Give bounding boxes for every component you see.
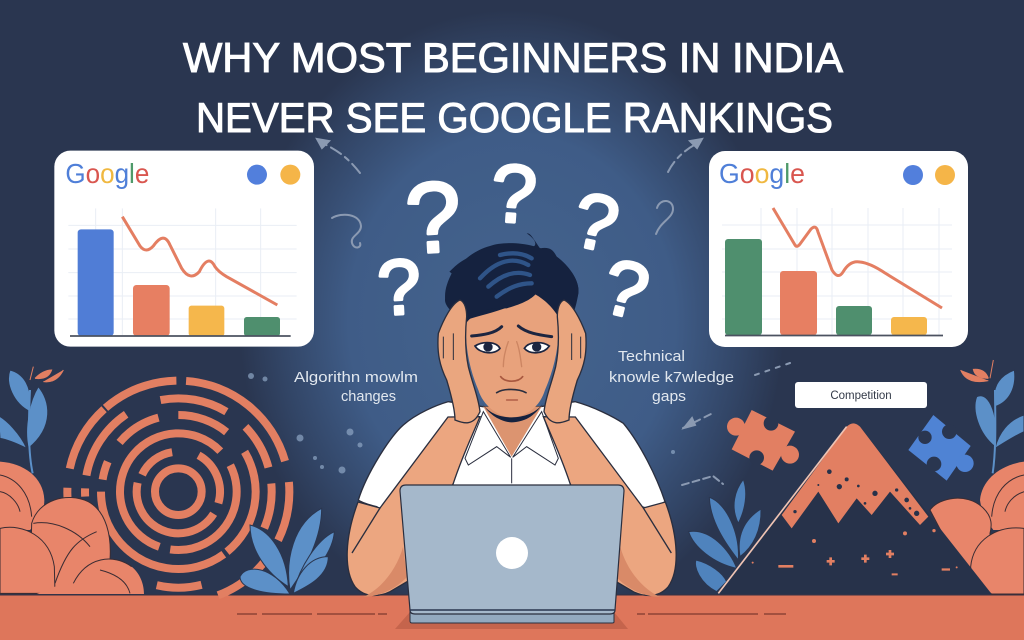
eyebrows <box>472 326 552 337</box>
floating dots <box>248 373 675 474</box>
right scene: mountain, puzzle pieces, plants <box>689 360 1024 594</box>
left arm <box>347 417 480 597</box>
icon: laptop <box>400 485 624 623</box>
callout: Competition: Competition <box>830 390 892 402</box>
grid lines <box>68 208 297 335</box>
Google logo: Google <box>65 158 149 189</box>
table <box>0 595 1024 640</box>
grid lines <box>722 208 952 335</box>
decorative dashed arrows and swirls <box>317 139 790 485</box>
neck <box>483 407 542 457</box>
Google logo: Google <box>719 158 805 189</box>
declining trend line <box>773 208 942 308</box>
hair front <box>445 233 579 323</box>
question marks <box>375 148 657 337</box>
icon: blue plant <box>961 360 1024 473</box>
hair back <box>445 243 579 323</box>
card <box>709 151 968 347</box>
panel: left Google chart card <box>54 151 314 347</box>
shirt <box>358 402 665 520</box>
icon: coral puzzle piece <box>727 410 799 471</box>
collar <box>465 412 558 483</box>
laptop logo <box>496 537 528 569</box>
text: technical knowledge gaps label: Technical <box>618 348 685 365</box>
icon: coral bushes <box>930 462 1024 594</box>
declining trend line <box>122 217 277 305</box>
text: technical knowledge gaps label: knowle k7wledge <box>609 369 734 386</box>
bars <box>78 229 280 336</box>
icon: coral bushes <box>0 462 144 594</box>
icon: mountain <box>718 423 992 594</box>
text: technical knowledge gaps label: gaps <box>652 388 686 405</box>
left scene: maze and plants <box>0 335 335 640</box>
icon: tall blue plant <box>0 367 63 473</box>
question marks: ? <box>565 174 626 270</box>
icon: blue puzzle piece <box>908 415 974 481</box>
hands <box>438 300 586 423</box>
icon: circular maze <box>22 335 335 640</box>
title: NEVER SEE GOOGLE RANKINGS <box>196 94 833 141</box>
panel: right Google chart card <box>709 151 968 347</box>
question marks: ? <box>403 161 464 275</box>
axis <box>725 334 943 336</box>
text: algorithm changes label: changes <box>341 388 396 405</box>
question marks: ? <box>488 148 540 241</box>
eyes <box>475 342 549 353</box>
axis <box>70 333 291 338</box>
face <box>466 293 559 417</box>
question marks: ? <box>375 242 423 332</box>
title <box>183 34 843 141</box>
question marks: ? <box>594 241 657 337</box>
text: algorithm changes label: Algorithn mowlm <box>294 369 418 386</box>
chin shadow <box>482 403 543 422</box>
callout: Competition <box>795 382 927 408</box>
nose and mouth <box>497 342 526 400</box>
right arm <box>543 417 676 597</box>
card <box>54 151 314 347</box>
hair highlight <box>480 253 532 297</box>
header dots <box>247 165 300 185</box>
bars <box>725 239 927 335</box>
header dots <box>903 165 955 185</box>
icon: small blue plant <box>240 508 334 594</box>
title: WHY MOST BEGINNERS IN INDIA <box>183 34 843 81</box>
person <box>347 233 676 597</box>
icon: small blue plant <box>689 479 761 592</box>
